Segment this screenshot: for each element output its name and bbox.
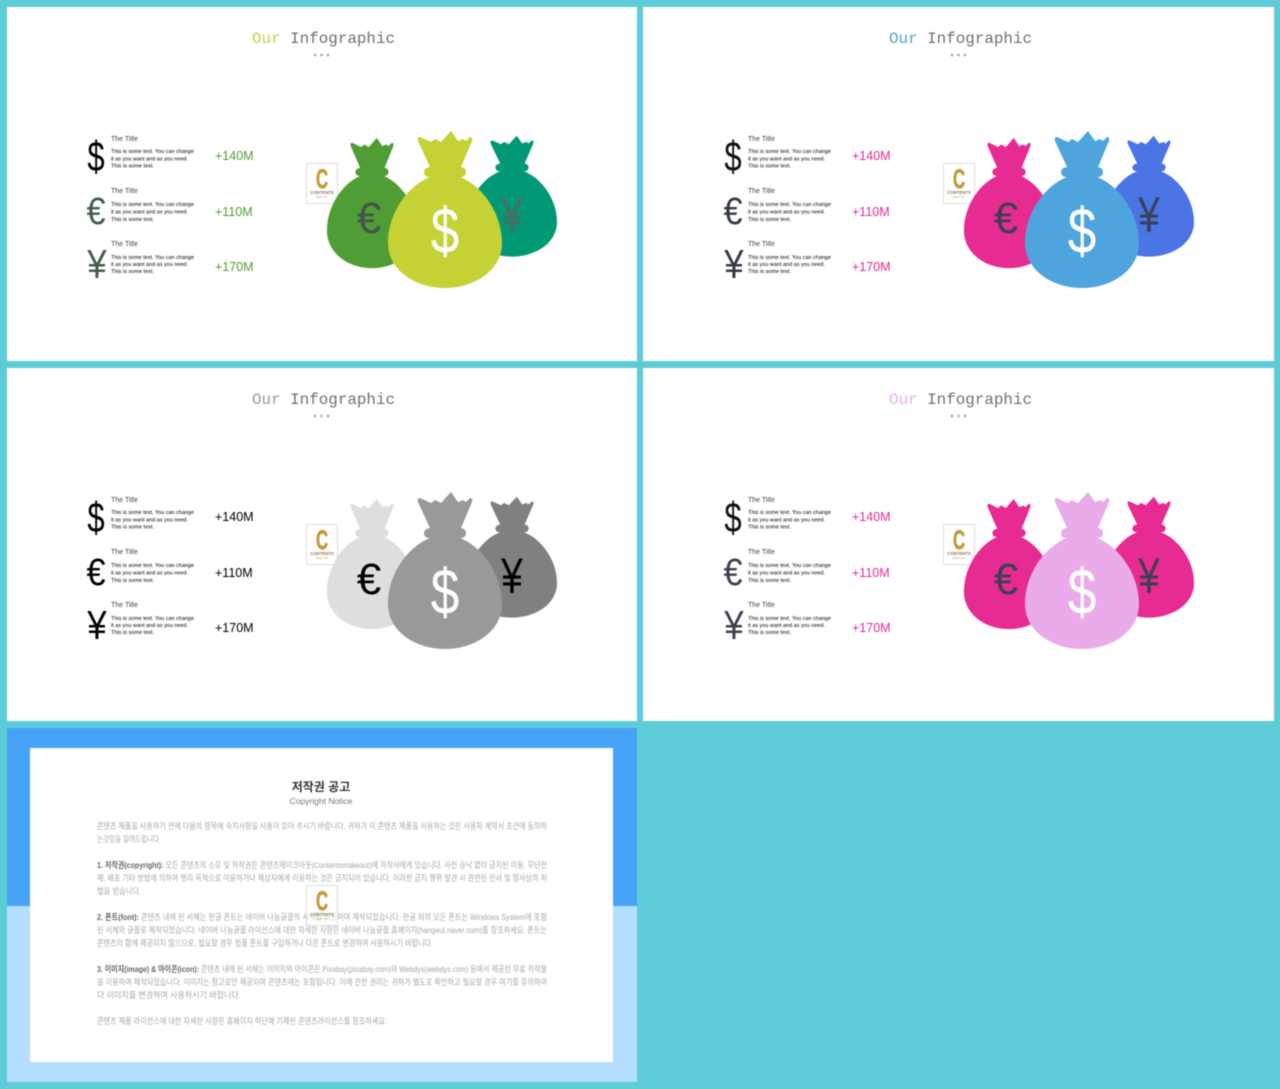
item: yen: ¥ <box>86 603 107 649</box>
logo: CONTENTS <box>947 551 971 556</box>
item: euro: it as you want and as you need. <box>111 210 188 216</box>
logo: C <box>953 525 965 555</box>
bag: yen <box>1104 497 1194 618</box>
item: yen: This is some text. <box>111 269 154 275</box>
bag: euro: € <box>994 194 1018 243</box>
bag: yen: ¥ <box>500 547 523 604</box>
item: yen: it as you want and as you need. <box>111 262 188 268</box>
item: euro: € <box>723 550 743 593</box>
item: euro: +110M <box>215 205 253 219</box>
item: euro: it as you want and as you need. <box>748 570 825 576</box>
item: euro: € <box>86 550 106 593</box>
item: euro <box>86 188 253 232</box>
bag: euro: € <box>357 555 381 604</box>
title: Our Infographic <box>889 30 1032 48</box>
panel: pink infographic <box>643 368 1274 721</box>
item: yen: This is some text. <box>111 630 154 636</box>
section 3: image and icon: 다 이미지를 변경하여 사용하시기 바랍니다. <box>97 990 241 1000</box>
item: dollar: +140M <box>852 510 891 524</box>
item: euro <box>723 549 890 593</box>
logo <box>306 524 338 564</box>
bag: dollar <box>388 492 502 649</box>
bag: yen <box>1104 136 1194 257</box>
item: yen: ¥ <box>723 242 744 288</box>
item: euro: The Title <box>111 549 138 556</box>
item: dollar: $ <box>724 493 742 541</box>
logo: MAKE OUT <box>316 918 329 921</box>
logo: CONTENTS <box>310 190 334 195</box>
section 2: font: 2. 폰트(font): 콘텐츠 내에 된 서체는 한글 폰트는 네이버 나눔글꼴의 서체를 이용하여 제작되었습니다. 한글 외의 모든 폰트는 Windows System에 포함 <box>97 912 547 922</box>
bag: euro <box>964 138 1054 268</box>
panel: green infographic <box>7 7 637 361</box>
heading: 저작권 공고 <box>292 779 350 794</box>
item: dollar: This is some text. You can change <box>111 149 194 155</box>
item: dollar: it as you want and as you need. <box>748 156 825 162</box>
title: Our Infographic <box>252 391 395 409</box>
item: euro: € <box>723 189 743 232</box>
item: euro: it as you want and as you need. <box>748 210 825 216</box>
item: euro: This is some text. You can change <box>748 563 831 569</box>
bag: yen: ¥ <box>1137 547 1160 604</box>
bag: euro <box>964 499 1054 629</box>
item: dollar: +140M <box>215 510 254 524</box>
section 3: image and icon <box>97 964 547 1000</box>
intro text <box>97 821 547 844</box>
item: dollar: it as you want and as you need. <box>111 156 188 162</box>
bag: dollar <box>1025 492 1139 649</box>
item: dollar: The Title <box>111 136 138 143</box>
item: dollar: This is some text. <box>748 524 791 530</box>
bag: yen <box>467 497 557 618</box>
item: yen: The Title <box>748 602 775 609</box>
logo: MAKE OUT <box>953 557 966 560</box>
logo: C <box>316 525 328 555</box>
item: dollar: This is some text. <box>111 524 154 530</box>
item: dollar: This is some text. You can change <box>111 510 194 516</box>
item: yen <box>86 602 254 649</box>
item: yen: it as you want and as you need. <box>748 262 825 268</box>
title: Our Infographic <box>889 391 1032 409</box>
item: dollar: This is some text. You can change <box>748 510 831 516</box>
title dots <box>951 415 966 417</box>
item: yen: This is some text. You can change <box>748 616 831 622</box>
item: yen: This is some text. <box>748 630 791 636</box>
money bags <box>964 492 1194 649</box>
item: yen: This is some text. You can change <box>111 255 194 261</box>
title dots <box>951 54 966 56</box>
item: euro: +110M <box>852 566 890 580</box>
logo: MAKE OUT <box>316 196 329 199</box>
bag: yen: ¥ <box>500 186 523 243</box>
item: dollar: The Title <box>748 136 775 143</box>
logo <box>944 164 974 204</box>
bag: dollar: $ <box>431 558 459 628</box>
logo: C <box>316 164 328 194</box>
bag: euro: € <box>357 194 381 243</box>
bag: euro: € <box>994 555 1018 604</box>
section 2: font <box>97 912 547 948</box>
logo <box>944 524 974 564</box>
item: yen <box>86 241 254 288</box>
bag: dollar: $ <box>431 197 459 267</box>
logo: CONTENTS <box>310 912 334 917</box>
item: yen: ¥ <box>86 242 107 288</box>
bag: dollar <box>388 131 502 288</box>
title dots <box>314 415 329 417</box>
logo: MAKE OUT <box>953 196 966 199</box>
item: dollar: +140M <box>852 149 891 163</box>
section 1: copyright <box>97 860 547 896</box>
closing note: 콘텐츠 제품 라이선스에 대한 자세한 사항은 홈페이지 하단에 기재된 콘텐츠라이선스를 참조하세요. <box>97 1016 387 1026</box>
intro text: 콘텐츠 제품을 사용하기 전에 다음의 항목에 숙지사항을 사용이 읽어 주시기 바랍니다. 귀하가 이 콘텐츠 제품을 사용하는 것은 사용자 계약서 조건에 동의하 <box>97 821 547 831</box>
section 2: font: 된 서체와 글꼴로 제작되었습니다. 네이버 나눔글꼴 라이선스에 대한 자세한 사항은 네이버 나눔글꼴 홈페이지(hangeul.naver.com)를 참조하세요. 폰트는 <box>97 925 547 935</box>
item: yen: +170M <box>215 260 254 274</box>
item: dollar <box>724 132 891 180</box>
section 3: image and icon: 을 이용하여 제작되었습니다. 이미지는 참고로만 제공되며 콘텐츠에는 포함됩니다. 이에 관한 권리는 귀하가 별도로 확인하고 필요할 경우 여기를 유의하여 <box>97 977 547 987</box>
logo: CONTENTS <box>310 551 334 556</box>
item: euro: This is some text. <box>748 217 791 223</box>
money bags <box>327 131 557 288</box>
item: yen: The Title <box>111 602 138 609</box>
item: yen: +170M <box>215 621 254 635</box>
item: euro: This is some text. You can change <box>111 202 194 208</box>
item: yen: +170M <box>852 621 891 635</box>
item: dollar <box>87 493 254 541</box>
item: euro: This is some text. You can change <box>748 202 831 208</box>
logo: CONTENTS <box>947 190 971 195</box>
item: euro: The Title <box>111 188 138 195</box>
panel: blue infographic <box>643 7 1274 361</box>
item: dollar <box>87 132 254 180</box>
item: euro: This is some text. <box>111 578 154 584</box>
logo: MAKE OUT <box>316 557 329 560</box>
item: euro: The Title <box>748 549 775 556</box>
section 2: font: 콘텐츠의 함께 제공되지 않으므로, 필요할 경우 정품 폰트를 구입하거나 다른 폰트로 변경하여 사용하시기 바랍니다. <box>97 938 433 948</box>
item: yen: The Title <box>748 241 775 248</box>
section 1: copyright: 벌을 받습니다. <box>97 886 141 896</box>
bag: euro <box>327 499 417 629</box>
logo <box>306 886 338 926</box>
item: dollar: $ <box>87 132 105 180</box>
item: yen: This is some text. You can change <box>748 255 831 261</box>
logo: C <box>316 886 328 916</box>
item: euro: it as you want and as you need. <box>111 570 188 576</box>
logo <box>306 164 338 204</box>
bag: euro <box>327 138 417 268</box>
subheading: Copyright Notice <box>290 796 353 806</box>
item: euro: +110M <box>215 566 253 580</box>
item: dollar: it as you want and as you need. <box>748 518 825 524</box>
panel: gray infographic <box>7 368 637 721</box>
item: yen <box>723 241 891 288</box>
item: dollar: The Title <box>748 497 775 504</box>
item: dollar <box>724 493 891 541</box>
item: yen <box>723 602 891 649</box>
bag: yen: ¥ <box>1137 186 1160 243</box>
section 3: image and icon: 3. 이미지(image) & 아이콘(icon): 콘텐츠 내에 된 서체는 이미지와 아이콘은 Pixabay(pixabay.com)와 Webdys(webdys.com) 등에서 제공한 무료 저작물 <box>97 964 547 974</box>
item: dollar: This is some text. <box>111 164 154 170</box>
item: dollar: This is some text. <box>748 164 791 170</box>
section 1: copyright: 1. 저작권(copyright): 모든 콘텐츠의 소유 및 저작권은 콘텐츠메이크아웃(Contentsmakeout)에 저작사에게 있습니다. 사전 승낙 없이 금지된 이용, 무단전 <box>97 860 547 870</box>
title dots <box>314 54 329 56</box>
money bags <box>964 131 1194 288</box>
bag: dollar <box>1025 131 1139 288</box>
intro text: 는것임을 알려드립니다. <box>97 834 161 844</box>
item: yen: +170M <box>852 260 891 274</box>
item: euro <box>723 188 890 232</box>
item: dollar: The Title <box>111 497 138 504</box>
item: dollar: $ <box>87 493 105 541</box>
item: yen: The Title <box>111 241 138 248</box>
bag: yen <box>467 136 557 257</box>
item: euro: This is some text. You can change <box>111 563 194 569</box>
item: yen: ¥ <box>723 603 744 649</box>
item: yen: This is some text. <box>748 269 791 275</box>
logo: C <box>953 164 965 194</box>
item: yen: it as you want and as you need. <box>111 623 188 629</box>
bag: dollar: $ <box>1068 558 1096 628</box>
item: yen: it as you want and as you need. <box>748 623 825 629</box>
item: euro: € <box>86 189 106 232</box>
item: euro: The Title <box>748 188 775 195</box>
item: dollar: +140M <box>215 149 254 163</box>
bag: dollar: $ <box>1068 197 1096 267</box>
item: dollar: it as you want and as you need. <box>111 518 188 524</box>
title: Our Infographic <box>252 30 395 48</box>
item: dollar: This is some text. You can change <box>748 149 831 155</box>
item: dollar: $ <box>724 132 742 180</box>
panel: copyright notice <box>7 728 637 1082</box>
item: yen: This is some text. You can change <box>111 616 194 622</box>
item: euro: This is some text. <box>111 217 154 223</box>
money bags <box>327 492 557 649</box>
item: euro <box>86 549 253 593</box>
section 1: copyright: 재, 배포 기타 방법에 의하여 영리 목적으로 이용하거나 제삼자에게 이용하는 것은 금지되어 있습니다. 이러한 금지 행위 발견 시 관련된 민사 및 형사상의 처 <box>97 873 547 883</box>
item: euro: This is some text. <box>748 578 791 584</box>
item: euro: +110M <box>852 205 890 219</box>
